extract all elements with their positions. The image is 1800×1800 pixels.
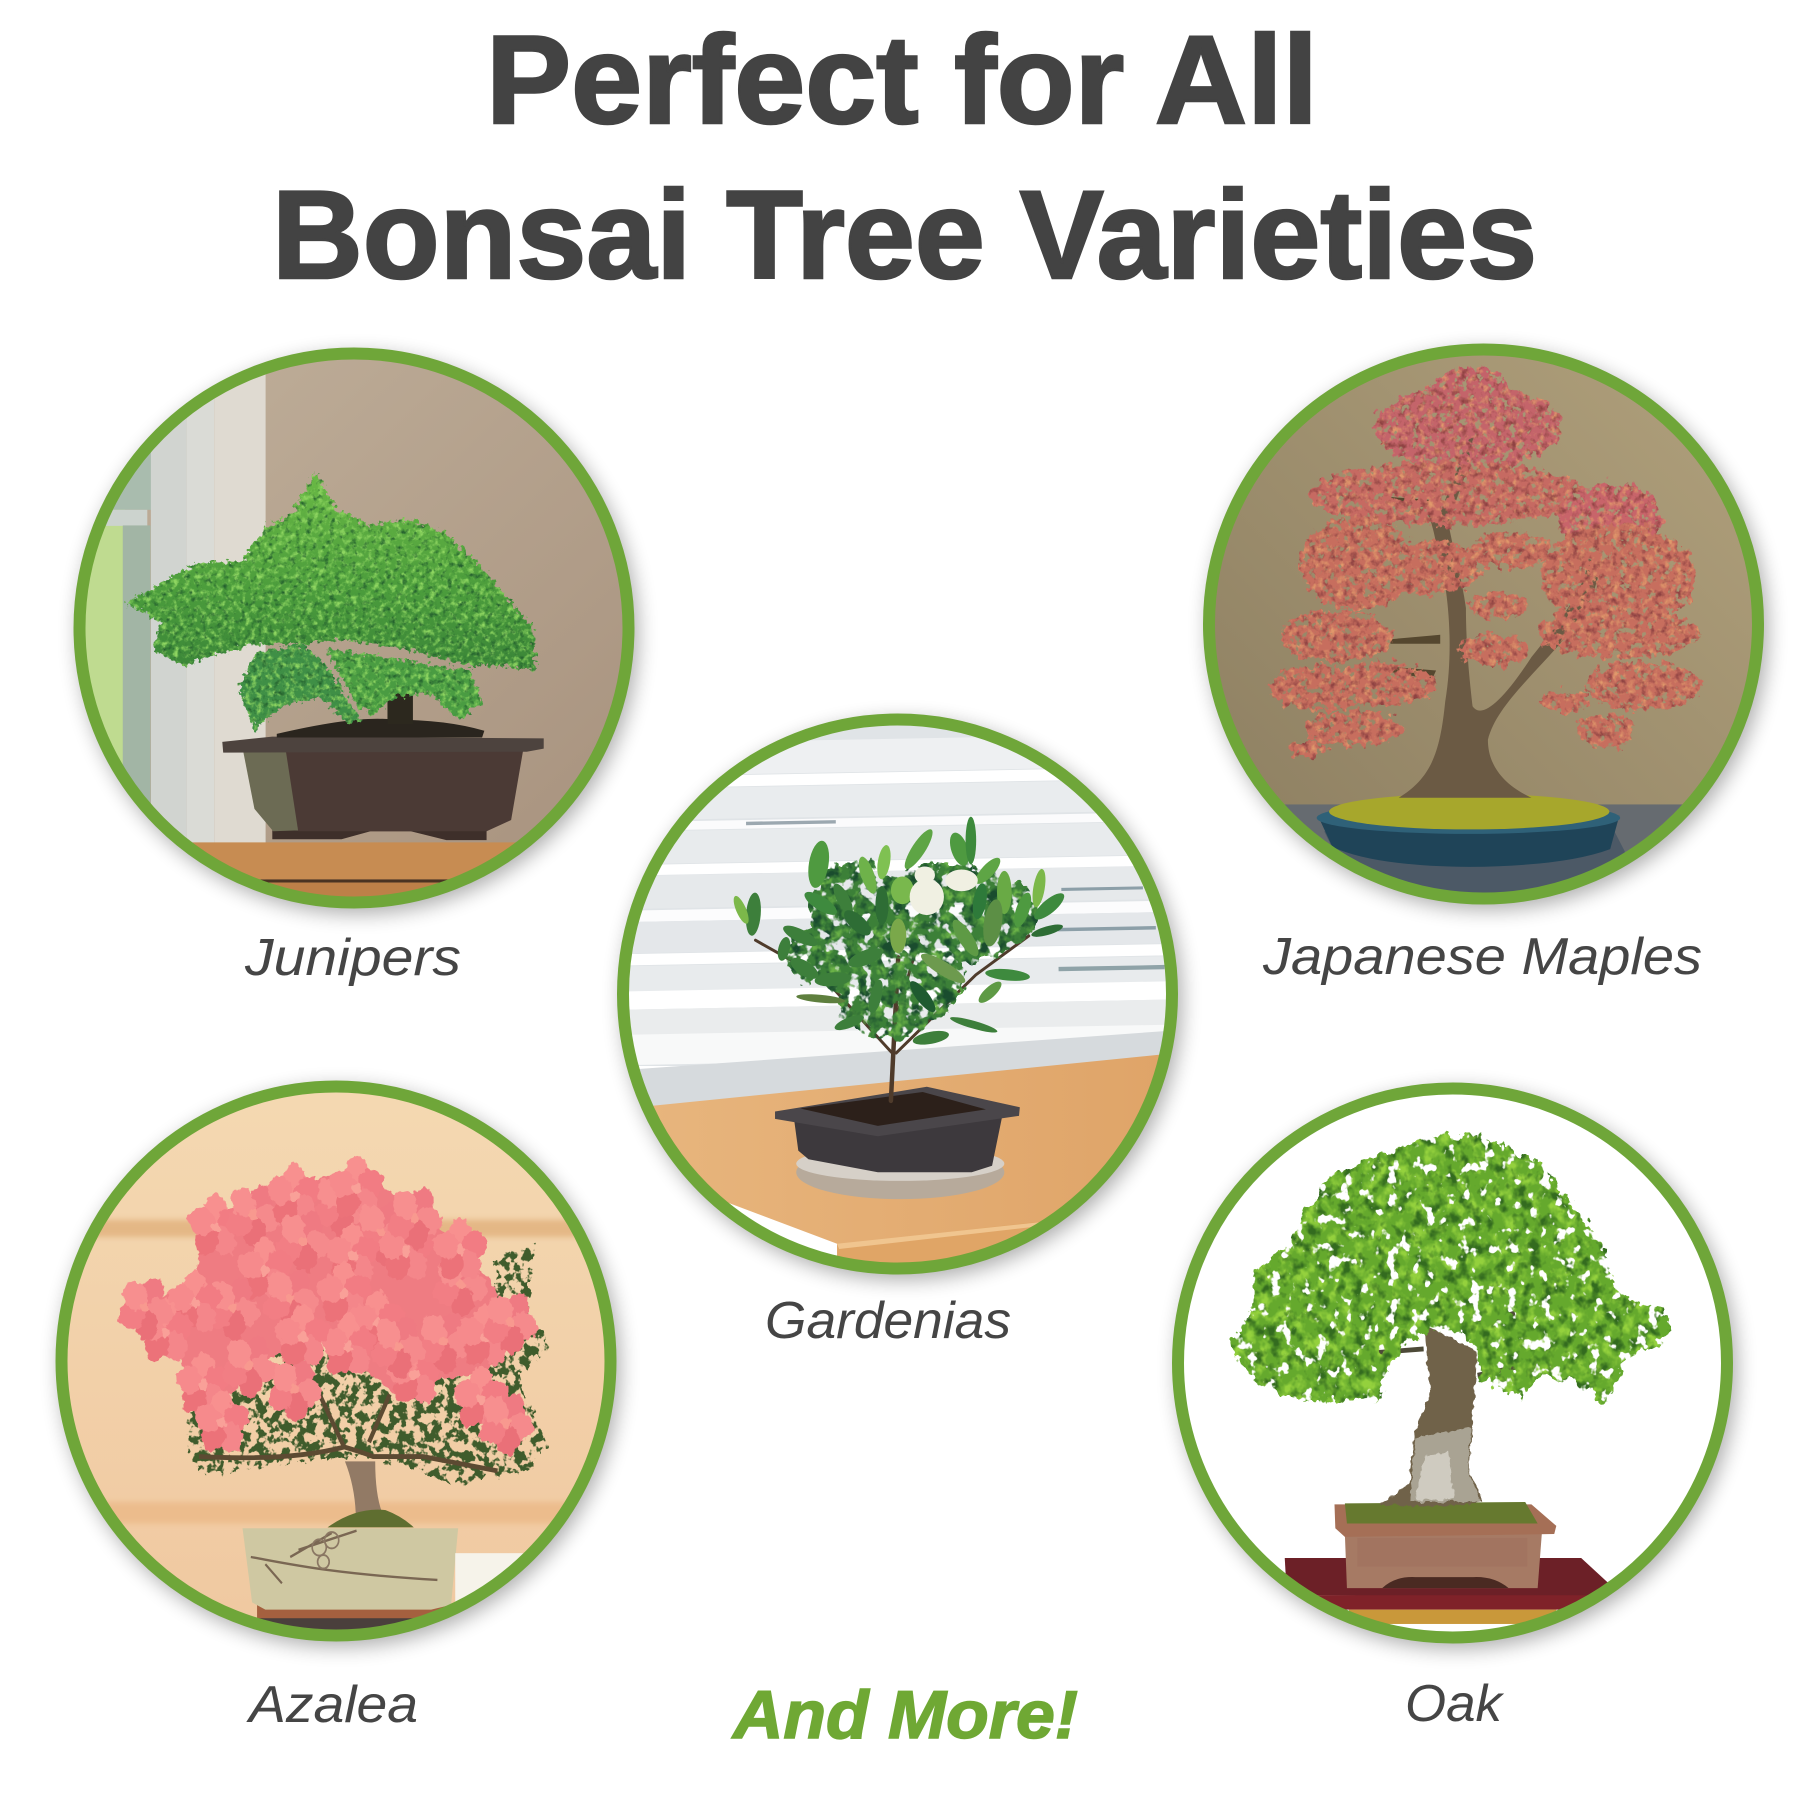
azalea pot [242, 1528, 458, 1630]
pot [1334, 1502, 1556, 1588]
trunk [1380, 1325, 1484, 1507]
photo: azalea bonsai [68, 1092, 604, 1630]
maple foliage [1268, 367, 1701, 758]
table [1285, 1558, 1610, 1624]
title: Bonsai Tree Varieties [272, 166, 1537, 305]
panel: gardenias [604, 706, 1196, 1350]
panel: japanese maples [1191, 327, 1772, 986]
photo: oak bonsai [1150, 1069, 1772, 1662]
callout: and more: And More! [731, 1677, 1078, 1753]
trunk and moss [328, 1461, 414, 1527]
ring [62, 1086, 610, 1636]
label: Oak [1405, 1675, 1505, 1733]
stems [755, 936, 1029, 1101]
white gardenia flowers [910, 866, 978, 915]
panel: oak [1150, 1069, 1772, 1733]
gardenia foliage mass [784, 862, 1035, 1038]
juniper lower foliage [239, 644, 482, 731]
pot [1317, 794, 1620, 867]
gardenia leaves [731, 817, 1068, 1047]
title: Perfect for All [486, 11, 1318, 150]
photo: gardenia bonsai [629, 726, 1166, 1262]
table top [653, 1054, 1160, 1262]
azalea branches [199, 1385, 498, 1471]
pot [222, 737, 544, 840]
ring [80, 354, 628, 902]
photo: juniper bonsai [86, 360, 622, 896]
window blinds [629, 726, 1166, 1106]
label: Japanese Maples [1262, 928, 1702, 986]
title [272, 11, 1537, 305]
ring [623, 720, 1172, 1268]
table [192, 842, 516, 896]
stand [1324, 831, 1625, 898]
photo: maple bonsai [1215, 356, 1752, 892]
plant card [455, 1553, 526, 1606]
label: Gardenias [765, 1292, 1011, 1350]
panel: junipers [45, 327, 670, 987]
panel: azalea [41, 1069, 622, 1734]
juniper foliage [125, 472, 536, 671]
azalea leaves [182, 1246, 551, 1485]
branches [1361, 1313, 1523, 1375]
ring [1209, 350, 1758, 898]
pot [775, 1087, 1020, 1172]
trunk and branches [1382, 425, 1600, 798]
ring [1178, 1088, 1727, 1638]
oak foliage [1231, 1134, 1672, 1404]
label: Azalea [246, 1676, 418, 1734]
label: Junipers [244, 929, 461, 987]
soil and trunk [277, 693, 484, 737]
wall bands [83, 1220, 580, 1524]
azalea blossoms [114, 1155, 541, 1458]
saucer [796, 1156, 1004, 1200]
